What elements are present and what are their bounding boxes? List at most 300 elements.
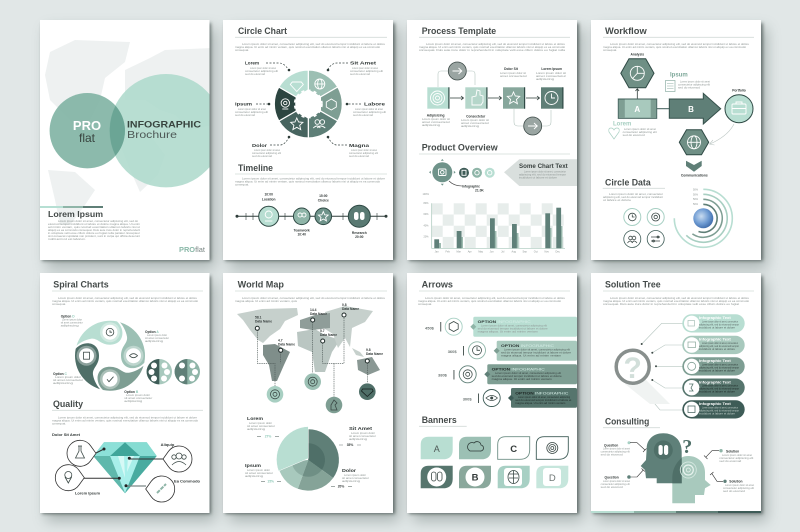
pie chart xyxy=(276,426,339,491)
heading: Process Template: Process Template xyxy=(422,26,496,36)
heading: Spiral Charts: Spiral Charts xyxy=(53,280,109,290)
consulting callout: solution 1: consectetur adipiscing elit xyxy=(719,457,754,460)
step labels: Lorem ipsum dolor sit xyxy=(536,72,566,75)
cover paragraph: mollit anim id est laborum. xyxy=(48,238,86,241)
arrows intro: Lorem ipsum dolor sit amet, consectetur adipiscing elit, sed do eiusmod tempor incididunt ut labore et dolore xyxy=(425,297,566,300)
step labels: Lorem ipsum dolor sit xyxy=(500,72,526,75)
pie labels: adipiscing xyxy=(245,475,264,478)
arrow row 4: sed do eiusmod tempor incididunt ut labore et xyxy=(515,399,572,402)
banner D: D xyxy=(549,473,556,484)
banner cloud xyxy=(459,437,491,459)
step labels: amet consectetur xyxy=(536,75,566,78)
option labels: Lorem ipsum dolor xyxy=(126,394,150,397)
pill 1: Infographic Text xyxy=(699,316,732,320)
callout: Sit Amet: consectetur adipiscing elit xyxy=(350,70,383,73)
timeline node: Choice: Choice xyxy=(318,199,329,203)
process intro: Lorem ipsum dolor sit amet, consectetur adipiscing elit, sed do eiusmod tempor incididunt ut labore et dolore xyxy=(426,43,566,46)
lorem note: Lorem ipsum dolor sit amet xyxy=(624,128,656,131)
heading: Timeline: Timeline xyxy=(238,163,273,173)
hexagon: Analysis xyxy=(621,52,654,88)
pill 1: Lorem ipsum dolor sit amet, consectetur xyxy=(702,320,738,324)
consulting callout: question 2: sed do eiusmod xyxy=(601,486,623,489)
map pins and labels: Data Name xyxy=(366,352,383,356)
question ring xyxy=(616,350,670,404)
banner A xyxy=(421,437,453,459)
step labels: Adipisicing xyxy=(427,114,445,118)
callout: Lorem: Lorem ipsum dolor sit amet xyxy=(250,67,276,70)
step 3: star xyxy=(503,87,525,109)
map pins and labels: Data Name xyxy=(278,342,295,346)
banner B xyxy=(459,466,491,488)
pill 2: incididunt ut labore et dolore xyxy=(699,348,736,351)
cover paragraph: Lorem ipsum dolor sit amet, consectetur adipiscing elit, sed do xyxy=(58,220,139,223)
pie labels: sit amet consectetur xyxy=(245,472,273,475)
workflow diagram xyxy=(609,52,753,178)
process intro: consequat. Duis aute irure dolor in reprehenderit in voluptate velit esse cillum dolore eu fugiat nulla xyxy=(419,49,566,52)
radial arc chart xyxy=(674,188,732,247)
cover title: Brochure: Brochure xyxy=(127,129,177,141)
map pins and labels: Data Name xyxy=(255,320,272,324)
tree connectors xyxy=(641,323,684,410)
timeline node: Location xyxy=(259,192,279,226)
pie labels: Ipsum xyxy=(245,463,261,468)
quality intro xyxy=(52,416,199,426)
solution intro: Lorem ipsum dolor sit amet, consectetur adipiscing elit, sed do eiusmod tempor incididunt ut labore et dolore xyxy=(610,297,750,300)
callout: Sit Amet: Lorem ipsum dolor sit amet xyxy=(352,67,378,70)
timeline node: Teamwork: 10:40 xyxy=(297,233,306,237)
pie labels: adipiscing xyxy=(342,480,361,483)
callout: Labore: consectetur adipiscing elit xyxy=(353,111,386,114)
icon: binoculars xyxy=(654,440,673,460)
timeline node: Research: 20:00 xyxy=(355,235,364,239)
solution intro: consequat. Duis aute irure dolor in reprehenderit in voluptate velit esse cillum dolore eu fugiat xyxy=(603,303,739,306)
map pins and labels: 14.4 xyxy=(310,308,317,312)
callout: Ipsum: Ipsum xyxy=(235,102,252,106)
step labels: amet consectetur xyxy=(422,121,450,124)
circle arrow bottom xyxy=(524,117,542,135)
consulting callout: solution 2: sed do eiusmod xyxy=(723,490,746,493)
pill 5: adipiscing elit, sed do eiusmod tempor xyxy=(699,409,739,412)
pill 1 xyxy=(682,314,745,332)
chart banner: adipiscing elit, sed do eiusmod tempor xyxy=(519,174,566,176)
pill 3 xyxy=(682,357,745,376)
ipsum note: Lorem ipsum dolor sit amet xyxy=(680,80,710,84)
badge: Ea Commodo: Ea Commodo xyxy=(174,480,200,484)
circle data text xyxy=(603,193,663,202)
badge: Dolor Sit Amet: Dolor Sit Amet xyxy=(52,433,81,437)
ipsum note xyxy=(666,73,710,92)
arrow row 1: 450$ xyxy=(425,326,435,330)
timeline text: magna aliqua. Ut enim ad minim veniam, quis nostrud exercitation ullamco laboris nisi ut aliquip ex ea commodo xyxy=(235,180,381,184)
process intro xyxy=(419,43,566,52)
badge: Lorem Ipsum xyxy=(55,465,121,496)
arrow row 2: magna aliqua. Ut enim ad minim veniam xyxy=(501,354,561,358)
bar chart: Apr xyxy=(468,250,472,254)
badge: Aliquip xyxy=(128,443,192,472)
consulting callout: question 2: consectetur adipiscing elit xyxy=(601,483,630,486)
pill 2 xyxy=(682,336,745,354)
map pins and labels: 4.7 xyxy=(278,338,283,342)
heading: Consulting: Consulting xyxy=(605,416,649,426)
hexagon: Communications xyxy=(679,130,709,178)
callout: Dolor: Dolor xyxy=(252,143,267,148)
badge: Dolor Sit Amet xyxy=(52,433,106,466)
heads overlap xyxy=(672,458,682,483)
diamond xyxy=(93,442,157,493)
map pins and labels: 5.7 xyxy=(320,329,325,333)
step labels: adipiscing xyxy=(536,78,555,81)
arrow row 1: sed do eiusmod tempor incididunt ut labore et dolore xyxy=(478,328,548,330)
panel: world map page xyxy=(223,273,393,513)
world map watermark xyxy=(45,40,212,225)
callout: Magna: Magna xyxy=(349,143,370,148)
pie labels: sit amet consectetur xyxy=(349,435,376,438)
consulting callout: solution 2: consectetur adipiscing elit xyxy=(723,487,754,490)
product icons: 21.0K xyxy=(475,188,484,192)
curved arrow xyxy=(710,124,734,145)
heading: Solution Tree: Solution Tree xyxy=(605,280,661,290)
arrow row 4: magna aliqua. Ut enim ad minim veniam xyxy=(515,402,565,405)
callout: Labore: Lorem ipsum dolor sit amet xyxy=(355,108,383,111)
consulting callout: solution 2 xyxy=(710,472,754,493)
consulting callout: question 1 xyxy=(601,441,646,456)
callout: Sit Amet: Sit Amet xyxy=(350,60,377,66)
question ring: ? xyxy=(624,352,642,385)
connector top xyxy=(438,71,475,87)
circle overlap xyxy=(110,106,125,156)
cover heading: Lorem Ipsum xyxy=(48,210,103,219)
pie labels: adipiscing xyxy=(247,428,266,431)
step labels: adipiscing xyxy=(461,125,480,128)
consulting callout: question 1: Lorem ipsum dolor sit amet xyxy=(603,448,630,450)
ipsum note: consectetur adipiscing elit xyxy=(678,84,710,86)
panel: workflow and circle data page xyxy=(591,20,761,260)
pill 4: Lorem ipsum dolor sit amet, consectetur xyxy=(702,385,738,388)
banners row 2 xyxy=(421,466,568,488)
pie labels: 15% xyxy=(267,480,274,484)
bar chart: Dec xyxy=(555,250,561,254)
badge: Aliquip: Aliquip xyxy=(161,443,174,447)
arrows intro: magna aliqua. Ut enim ad minim veniam, quis nostrud exercitation ullamco laboris nisi ut aliquip ex ea commodo xyxy=(418,300,562,303)
map pins and labels: 58.1 xyxy=(255,316,262,320)
bar chart: Jan xyxy=(435,250,439,254)
bar chart: Sep xyxy=(522,250,528,254)
chart banner xyxy=(504,159,577,186)
arrow row 4: Lorem ipsum dolor sit amet, consectetur adipiscing xyxy=(518,396,571,399)
spiral chart xyxy=(75,321,145,391)
bar chart: Mar xyxy=(457,250,461,254)
map pins and labels: Data Name xyxy=(320,333,337,337)
pill 3: Lorem ipsum dolor sit amet, consectetur xyxy=(702,364,738,366)
arrow row 1: magna aliqua. Ut enim ad minim veniam xyxy=(478,330,538,334)
intro text: consequat. xyxy=(235,49,249,52)
arrow row 2: 360$ xyxy=(448,349,457,354)
timeline text: consequat. xyxy=(235,184,249,186)
callout: Magna: Lorem ipsum dolor sit amet xyxy=(351,149,377,152)
option labels: Option C xyxy=(53,372,68,376)
timeline node: Teamwork: Teamwork xyxy=(294,229,310,233)
chart banner: incididunt ut labore et dolore xyxy=(519,176,558,180)
bar chart: Jul xyxy=(501,250,505,254)
bar chart: Nov xyxy=(544,250,550,254)
cover title: PRO: PRO xyxy=(73,118,101,133)
spiral intro: magna aliqua. Ut enim ad minim veniam, quis nostrud exercitation ullamco laboris nisi ut aliquip ex ea commodo xyxy=(52,300,199,303)
accent bar xyxy=(40,206,103,208)
pill 5 xyxy=(682,400,745,418)
consulting callout: solution 2: Lorem ipsum dolor sit amet xyxy=(725,484,754,487)
panel: solution tree and consulting page xyxy=(591,273,761,513)
pill 5: Infographic Text xyxy=(699,402,732,406)
pill 5: incididunt ut labore et dolore xyxy=(699,412,736,415)
cover paragraph xyxy=(48,220,140,241)
callout: Dolor: Lorem ipsum dolor sit amet xyxy=(254,149,280,152)
consulting callout: question 2: Lorem ipsum dolor sit amet xyxy=(603,480,630,483)
arrow row 2 xyxy=(448,341,577,361)
consulting callout: solution 2: Solution xyxy=(729,480,742,484)
pill 2: adipiscing elit, sed do eiusmod tempor xyxy=(699,345,739,348)
pie labels: 27% xyxy=(265,435,271,439)
step labels: Lorem ipsum dolor sit xyxy=(461,119,489,122)
chart banner: Lorem ipsum dolor sit amet, consectetur xyxy=(524,170,566,174)
step labels xyxy=(422,67,566,128)
banner C: C xyxy=(510,444,517,455)
chart banner: Some Chart Text xyxy=(519,164,568,170)
intro text xyxy=(235,43,386,52)
callout: Lorem: consectetur adipiscing elit xyxy=(245,70,278,73)
banner B: B xyxy=(472,472,479,484)
option labels: sit amet consectetur xyxy=(145,337,169,340)
option labels xyxy=(53,314,169,403)
callout: Lorem: Lorem xyxy=(245,60,259,66)
map dashed connectors xyxy=(257,317,367,397)
arrows intro xyxy=(418,297,566,306)
callout: Dolor: consectetur adipiscing elit xyxy=(252,152,281,155)
pie labels: Lorem ipsum dolor xyxy=(247,469,270,472)
bar chart: May xyxy=(478,250,484,254)
option labels: Lorem ipsum dolor xyxy=(147,334,167,337)
callout: Ipsum: sed do eiusmod xyxy=(235,114,256,117)
timeline text xyxy=(235,178,386,186)
arrow row 3 xyxy=(438,364,577,384)
arrow row 3: magna aliqua. Ut enim ad minim veniam xyxy=(492,378,552,381)
spiral intro: Lorem ipsum dolor sit amet, consectetur adipiscing elit, sed do eiusmod tempor incididunt ut labore et dolore xyxy=(58,297,198,300)
timeline chart xyxy=(236,192,388,239)
banner D xyxy=(536,466,568,488)
logo: PROflat xyxy=(179,245,206,254)
option labels: Option A xyxy=(145,330,159,334)
bar chart: 40% xyxy=(424,224,429,228)
arrow row 1: Lorem ipsum dolor sit amet, consectetur adipiscing elit xyxy=(481,324,547,328)
bar chart: Aug xyxy=(511,250,517,254)
icon circles xyxy=(624,208,664,248)
world map intro: Lorem ipsum dolor sit amet, consectetur adipiscing elit, sed do eiusmod tempor incididunt ut labore et dolore xyxy=(242,297,386,300)
pill 5: Lorem ipsum dolor sit amet, consectetur xyxy=(702,406,738,409)
bar chart: 60% xyxy=(424,213,429,216)
product icons: Infographic xyxy=(462,184,480,188)
arrow row 2: sed do eiusmod tempor incididunt ut labore et dolore xyxy=(501,352,572,354)
bar chart: 100% xyxy=(422,193,430,196)
heading: Arrows: Arrows xyxy=(422,280,453,290)
heading: Product Overview: Product Overview xyxy=(422,143,499,153)
arrow row 3: Lorem ipsum dolor sit amet, consectetur adipiscing elit xyxy=(495,372,561,375)
bar chart: 20% xyxy=(424,236,429,238)
banners row 1 xyxy=(421,437,568,459)
arrow row 3: OPTION INFOGRAPHIC xyxy=(492,367,545,372)
circle data text: adipiscing elit, sed do eiusmod tempor incididunt xyxy=(603,196,663,199)
quality intro: Lorem ipsum dolor sit amet, consectetur adipiscing elit, sed do eiusmod tempor incididunt ut labore et dolore xyxy=(58,416,198,420)
bar chart: Feb xyxy=(446,250,450,254)
head: dark xyxy=(641,433,682,483)
callout: Labore: sed do eiusmod xyxy=(353,114,374,117)
process intro: magna aliqua. Ut enim ad minim veniam, quis nostrud exercitation ullamco laboris nisi ut aliquip ex ea commodo xyxy=(419,46,566,49)
heading: World Map: World Map xyxy=(238,280,284,290)
pill 4 xyxy=(682,378,745,397)
consulting callout: question 2: Question xyxy=(604,476,619,480)
option labels: sit amet consectetur xyxy=(124,397,153,400)
heading: Circle Data: Circle Data xyxy=(605,177,652,187)
option labels: Lorem ipsum dolor xyxy=(55,376,81,379)
ipsum note: Ipsum xyxy=(670,73,688,79)
connector bottom xyxy=(514,109,551,126)
world map xyxy=(237,306,380,381)
callout: Dolor: sed do eiusmod xyxy=(252,155,273,158)
cover paragraph: in voluptate velit esse cillum dolore eu fugiat nulla pariatur. Excepteur xyxy=(48,232,140,235)
pie labels xyxy=(245,416,376,489)
panel: process template and product overview page xyxy=(407,20,577,260)
pie labels: Lorem ipsum dolor xyxy=(249,422,272,425)
intro text: Lorem ipsum dolor sit amet, consectetur adipiscing elit, sed do eiusmod tempor incididunt ut labore et dolore xyxy=(242,43,386,46)
option labels: sit amet consectetur xyxy=(61,322,83,324)
icon: globe xyxy=(693,208,713,228)
arrow row 2: OPTION INFOGRAPHIC xyxy=(501,343,554,348)
radial arc chart: 50% xyxy=(693,198,699,201)
world map intro: magna aliqua. Ut enim ad minim veniam, quis xyxy=(235,300,298,303)
heading: Banners: Banners xyxy=(422,415,457,425)
arrows between steps xyxy=(450,96,540,100)
step labels: Consectetur xyxy=(466,114,486,118)
map icon circles xyxy=(267,373,376,413)
bar chart: Oct xyxy=(534,250,538,254)
arrow row 3: sed do eiusmod tempor incididunt ut labore et dolore xyxy=(492,375,562,378)
consulting callout: question 1: Question xyxy=(604,444,618,448)
callout: Labore: Labore xyxy=(364,102,386,106)
arrow row 4 xyxy=(463,388,577,408)
circle arrow top xyxy=(448,62,466,80)
consulting callout: question 2 xyxy=(601,468,645,489)
bottom colour strip xyxy=(591,511,761,513)
pie labels: Lorem xyxy=(247,416,263,421)
heading: Workflow: Workflow xyxy=(605,26,648,36)
badge: Ea Commodo xyxy=(124,476,200,502)
consulting heads xyxy=(641,433,711,503)
pill 4: incididunt ut labore et dolore xyxy=(699,391,736,394)
callout: Dolor xyxy=(252,136,290,158)
world map intro xyxy=(235,297,386,303)
map pins and labels: 0.8 xyxy=(342,303,347,307)
workflow intro xyxy=(603,43,750,52)
pie labels: sit amet consectetur xyxy=(247,425,275,428)
step 2: thumb xyxy=(465,87,488,109)
quality intro: magna aliqua. Ut enim ad minim veniam, quis nostrud exercitation ullamco laboris nisi ut aliquip ex ea commodo xyxy=(52,420,199,422)
panel: arrows and banners page xyxy=(407,273,577,513)
cover title: Infographic: INFOGRAPHIC xyxy=(127,120,201,130)
map pins and labels: Data Name xyxy=(342,307,359,311)
hexagon: Analysis: Analysis xyxy=(631,52,644,56)
circle data text: ut labore et dolore xyxy=(603,199,632,202)
pie labels: sit amet consectetur xyxy=(342,477,369,480)
callout: Magna xyxy=(327,136,378,158)
callout: Ipsum: consectetur adipiscing elit xyxy=(235,111,268,114)
consulting callout: question 1: sed do eiusmod xyxy=(601,454,623,456)
arrow row 4: 300$ xyxy=(463,396,472,402)
callout: Sit Amet xyxy=(327,60,383,76)
pill 3: adipiscing elit, sed do eiusmod tempor xyxy=(699,366,739,370)
option labels: Option B xyxy=(124,390,139,394)
step labels: Lorem Ipsum xyxy=(541,67,562,71)
callout: Ipsum: Lorem ipsum dolor sit amet xyxy=(238,108,266,111)
cover title: flat: flat xyxy=(79,131,96,145)
pill 4: Infographic Text xyxy=(699,380,732,384)
option labels: adipiscing xyxy=(61,324,80,328)
banner brain xyxy=(498,466,530,488)
ipsum note: sed do eiusmod xyxy=(678,86,701,90)
banner C xyxy=(498,437,530,459)
pie labels: adipiscing xyxy=(349,438,368,441)
pill 3: incididunt ut labore et dolore xyxy=(699,370,736,372)
step labels: Lorem ipsum dolor sit xyxy=(422,118,450,121)
solution intro: magna aliqua. Ut enim ad minim veniam, quis nostrud exercitation ullamco laboris nisi ut aliquip ex ea commodo xyxy=(603,300,750,303)
left circle xyxy=(50,93,125,168)
consulting callout: solution 1 xyxy=(704,449,754,463)
pill 3: Infographic Text xyxy=(699,359,732,363)
heading: Quality: Quality xyxy=(53,399,83,409)
timeline text: Lorem ipsum dolor sit amet, consectetur adipiscing elit, sed do eiusmod tempor incididunt ut labore et dolore xyxy=(242,178,386,180)
panel: spiral charts and quality page xyxy=(40,273,210,513)
option labels: adipiscing xyxy=(124,400,143,403)
arrow B: B xyxy=(688,105,694,114)
callout: Lorem xyxy=(245,60,290,76)
step labels: Dolor Sit xyxy=(504,67,519,71)
process flow diagram xyxy=(422,62,566,135)
pie labels: 20% xyxy=(338,485,344,489)
solution intro xyxy=(603,297,750,306)
panel: cover page xyxy=(40,20,223,260)
arrow row 2: Lorem ipsum dolor sit amet, consectetur adipiscing elit xyxy=(504,348,570,352)
pie labels: 35% xyxy=(347,443,353,447)
arrow row 1: OPTION INFOGRAPHIC xyxy=(478,319,531,324)
option pills xyxy=(682,314,745,418)
lorem note xyxy=(609,122,657,139)
heading: Circle Chart: Circle Chart xyxy=(238,26,287,36)
arrow row 1 xyxy=(425,317,577,337)
workflow intro: consequat. xyxy=(603,49,617,52)
small spiral wheels xyxy=(147,359,200,384)
timeline node: Choice xyxy=(315,194,332,225)
intro text: magna aliqua. Ut enim ad minim veniam, quis nostrud exercitation ullamco laboris nisi ut aliquip ex ea commodo xyxy=(235,46,381,49)
radial arc chart: 50% xyxy=(693,203,699,206)
panel: circle chart and timeline page xyxy=(223,20,393,260)
workflow intro: magna aliqua. Ut enim ad minim veniam, quis nostrud exercitation ullamco laboris nisi ut aliquip ex ea commodo xyxy=(603,46,747,49)
icon: gear xyxy=(680,462,696,478)
right circle xyxy=(115,74,210,188)
timeline node: Research: Research xyxy=(352,231,367,235)
map pins and labels: Data Name xyxy=(310,312,327,316)
pill 4: adipiscing elit, sed do eiusmod tempor xyxy=(699,388,739,391)
consulting callout: solution 1: Solution xyxy=(726,449,739,453)
cover paragraph: sint occaecat cupidatat non proident, sunt in culpa qui officia deserunt xyxy=(48,235,140,238)
callout: Magna: sed do eiusmod xyxy=(349,155,370,158)
workflow intro: Lorem ipsum dolor sit amet, consectetur adipiscing elit, sed do eiusmod tempor incididunt ut labore et dolore xyxy=(610,43,750,46)
